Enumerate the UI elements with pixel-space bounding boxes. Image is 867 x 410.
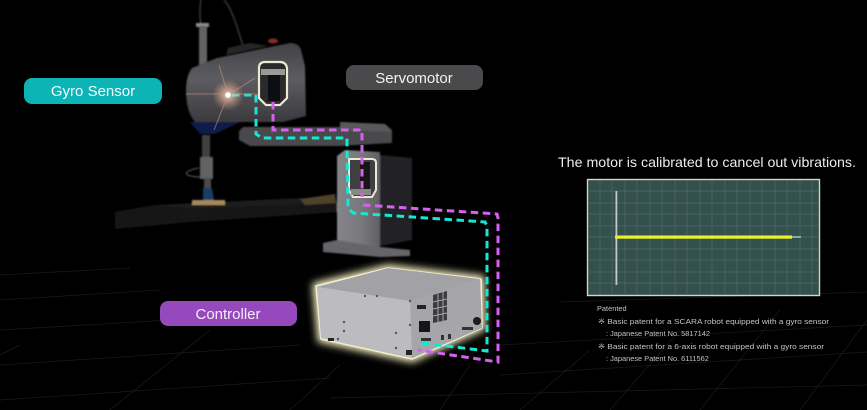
patent notes: ※ Basic patent for a SCARA robot equipped with a gyro sensor (598, 317, 830, 326)
label: Gyro Sensor (24, 78, 162, 104)
patent notes: : Japanese Patent No. 5817142 (606, 329, 710, 338)
motor upper (259, 62, 287, 105)
table (115, 194, 340, 229)
controller (315, 267, 483, 360)
patent notes (597, 304, 830, 363)
label: Controller (160, 301, 297, 326)
motor lower (349, 159, 376, 197)
label: Gyro Sensor: Gyro Sensor (51, 83, 135, 100)
chart axis (616, 191, 617, 285)
lower shaft (186, 135, 214, 200)
patent notes: : Japanese Patent No. 6111562 (606, 354, 709, 363)
magenta signal line (273, 102, 498, 362)
base column (323, 150, 412, 257)
label: Servomotor (346, 65, 483, 90)
upper shaft and cable (196, 0, 243, 68)
robot: SCARA arm illustration (115, 0, 412, 257)
yellow vibration trace (615, 236, 792, 239)
controller screws (337, 295, 411, 349)
patent notes: Patented (597, 304, 627, 313)
label: Controller: Controller (195, 306, 261, 323)
cyan signal line (232, 95, 487, 351)
patent notes: ※ Basic patent for a 6-axis robot equipped with a gyro sensor (598, 342, 825, 351)
label: Servomotor: Servomotor (375, 70, 453, 87)
lens flare on gyro sensor (186, 65, 258, 130)
residual baseline (780, 236, 801, 238)
chart heading: The motor is calibrated to cancel out vibrations. (558, 154, 856, 170)
vibration chart (588, 180, 820, 296)
servomotor outlines (259, 62, 376, 197)
controller ports (417, 291, 481, 341)
arm (239, 122, 392, 146)
head casing (186, 38, 306, 134)
